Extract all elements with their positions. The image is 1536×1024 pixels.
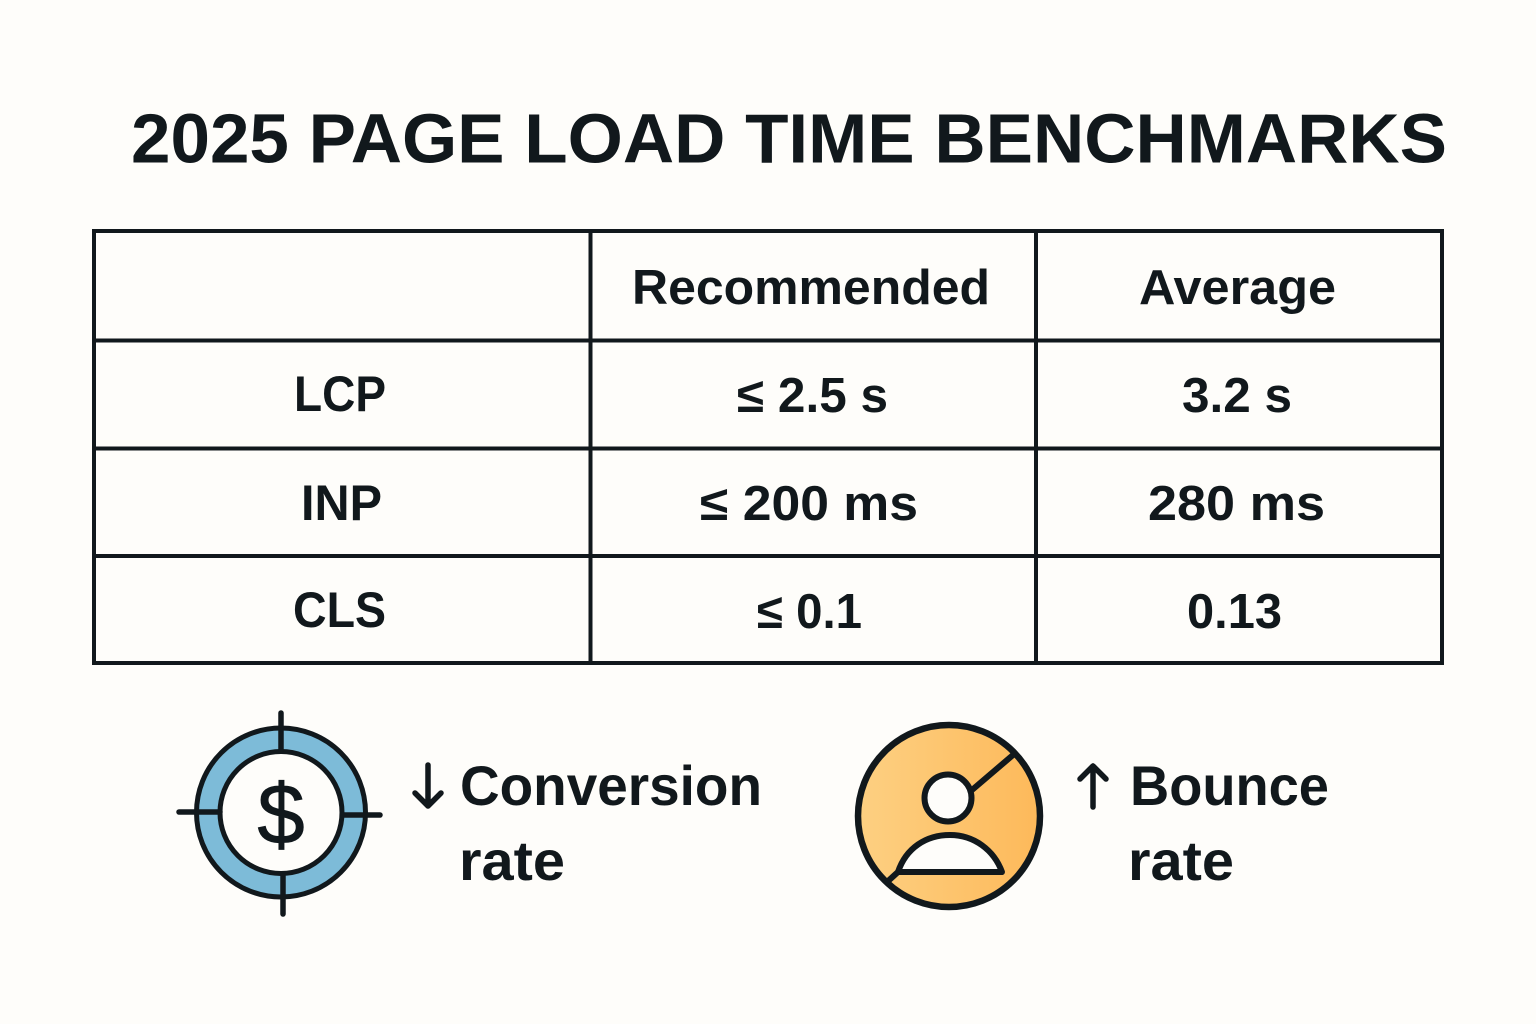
- benchmark table: [94, 231, 1442, 663]
- header: Average: Average: [1139, 261, 1336, 315]
- table grid: [94, 231, 1442, 663]
- dollar glyph: $: [257, 768, 305, 862]
- header: Recommended: Recommended: [632, 261, 990, 315]
- label: conversion rate: rate: [459, 829, 565, 892]
- CLS recommended: ≤ 0.1: [757, 585, 862, 639]
- icon: dollar target: [179, 713, 380, 914]
- LCP average: 3.2 s: [1182, 369, 1292, 423]
- title: 2025 PAGE LOAD TIME BENCHMARKS: [131, 100, 1447, 178]
- row label: INP: INP: [301, 475, 382, 531]
- icon: user bounce: [858, 725, 1040, 907]
- LCP recommended: ≤ 2.5 s: [737, 369, 888, 423]
- row label: LCP: LCP: [294, 366, 386, 422]
- up arrow: [1080, 766, 1106, 807]
- INP average: 280 ms: [1148, 477, 1325, 531]
- row label: CLS: CLS: [293, 582, 386, 638]
- label: conversion rate: Conversion: [460, 754, 762, 817]
- down arrow: [415, 765, 441, 806]
- label: bounce rate: [1128, 754, 1329, 892]
- label: bounce rate: rate: [1128, 829, 1234, 892]
- CLS average: 0.13: [1187, 585, 1282, 639]
- label: conversion rate: [459, 754, 762, 892]
- INP recommended: ≤ 200 ms: [700, 477, 918, 531]
- label: bounce rate: Bounce: [1130, 754, 1329, 817]
